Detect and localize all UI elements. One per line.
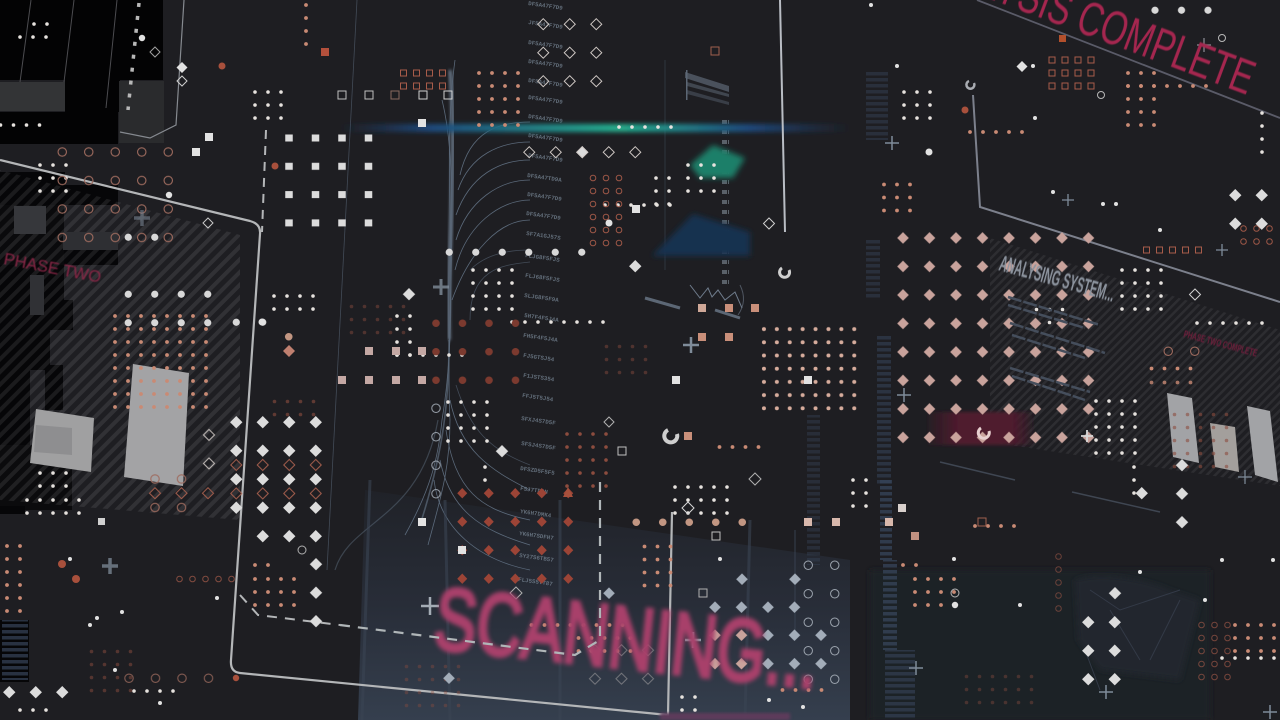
data column: hex codes: DF5A47F7D9	[528, 113, 564, 125]
panel frame: left	[0, 130, 672, 715]
dot grid: filled circles	[115, 0, 1221, 536]
dot grid: orange accent markers	[58, 62, 968, 681]
data column: hex codes: SLJG8F5F9A	[524, 292, 560, 304]
data column: hex codes: FLJG8F5FJS	[525, 252, 561, 264]
dot grid: dim red dots	[85, 300, 1233, 712]
dot grid: blue-grey diamonds, bottom	[436, 565, 834, 692]
label: analysing system: ANALYSING SYSTEM...	[997, 250, 1118, 307]
widget: waveform	[645, 285, 744, 318]
highlight band: pink	[928, 412, 1033, 445]
data lines: system readout	[1008, 297, 1105, 400]
dot grid: red markers	[423, 309, 582, 593]
data column: hex codes: 5H7F4F5J4A	[524, 312, 560, 324]
panel: top-left black mosaic	[0, 0, 164, 144]
data column: hex codes: F1JSTS354	[523, 372, 555, 383]
panel: bottom right map area	[870, 570, 1210, 720]
chart: curved data lines	[327, 0, 530, 570]
data column: hex codes: DF5A47F7D9	[528, 132, 564, 144]
panel frame: right	[973, 95, 1280, 302]
data column: hex codes: DF5A47F7D9	[528, 58, 564, 70]
label: phase two complete: PHASE TWO COMPLETE	[1182, 328, 1259, 359]
data column: hex codes: FFJ5T5J54	[522, 392, 554, 403]
data column: hex codes: SFXJ4S7D5F	[521, 415, 557, 427]
panel: left mosaic and stripes	[0, 170, 240, 682]
data column: hex codes: DF5A47F7D9	[528, 94, 564, 106]
frame glow at bottom	[660, 713, 790, 720]
panel frame: top right	[977, 0, 1280, 118]
chart: right bars	[1167, 393, 1278, 482]
icon: blue shape	[652, 214, 750, 256]
heading: scanning: SCANNING...	[430, 568, 823, 707]
foreground: white dashed trace over scanning	[340, 480, 600, 655]
dot grid: outlined red markers	[173, 54, 1276, 684]
label: phase two: PHASE TWO	[2, 250, 103, 287]
data column: hex codes	[518, 0, 564, 588]
data column: hex codes: DF5A47TD9A	[527, 172, 563, 184]
data column: hex codes: DF5A47F7D9	[528, 39, 564, 51]
panel frame: top left	[120, 0, 184, 138]
panel frame: vertical rule	[780, 0, 785, 232]
dot grid: white diamonds	[0, 138, 1275, 706]
icon: green arrow glow	[690, 145, 745, 178]
widget: small grey bars	[685, 70, 729, 105]
data column: hex codes: DF5A47F7D9	[526, 210, 562, 222]
dot grid: white square markers	[276, 124, 382, 237]
panel: faint vertical rules	[362, 60, 795, 720]
glow: horizontal beam	[340, 124, 850, 132]
panel: right striped window	[990, 238, 1280, 486]
data column: hex codes: FH5F4F5J4A	[523, 332, 559, 344]
data column: hex codes: FJ5GTSJ54	[523, 352, 555, 363]
dot grid: pink square markers	[321, 35, 1066, 540]
data column: hex codes: JF5A47F7D9	[528, 19, 564, 31]
column of tick marks: centre right	[722, 70, 915, 720]
icon: hook markers	[664, 81, 989, 442]
dot grid: outlined diamonds	[142, 10, 661, 693]
data column: hex codes: DF5A47F7D9	[527, 191, 563, 203]
panel frame: lower right	[940, 462, 1160, 512]
data column: hex codes: SFSJ4S7D5F	[521, 440, 557, 452]
chart: left bars	[30, 364, 189, 486]
data column: hex codes: FLJ68F5FJS	[525, 272, 561, 284]
data column: hex codes: YK6H7SDFH7	[519, 530, 555, 542]
data column: hex codes: DF5A47F7D9	[528, 152, 564, 164]
data column: hex codes: DF5A47F7D9	[528, 0, 564, 12]
data column: hex codes: DF5A47F7D9	[528, 77, 564, 89]
panel: bottom blue scanning area	[358, 490, 850, 720]
data column: hex codes: SY27S6TB57	[519, 552, 555, 564]
data column: hex codes: SF7A1GJ57S	[526, 230, 562, 242]
data column: hex codes: FLJ5S5YT87	[518, 576, 554, 588]
dot grid: pink diamonds, right block	[890, 224, 1102, 452]
dot grid: outlined circles	[49, 138, 1208, 694]
data column: hex codes: FSJ7TDSN	[520, 485, 549, 496]
data column: hex codes: DFSZD5F5F5	[520, 465, 556, 477]
data column: hex codes: YK6H7DMK4	[520, 508, 552, 519]
